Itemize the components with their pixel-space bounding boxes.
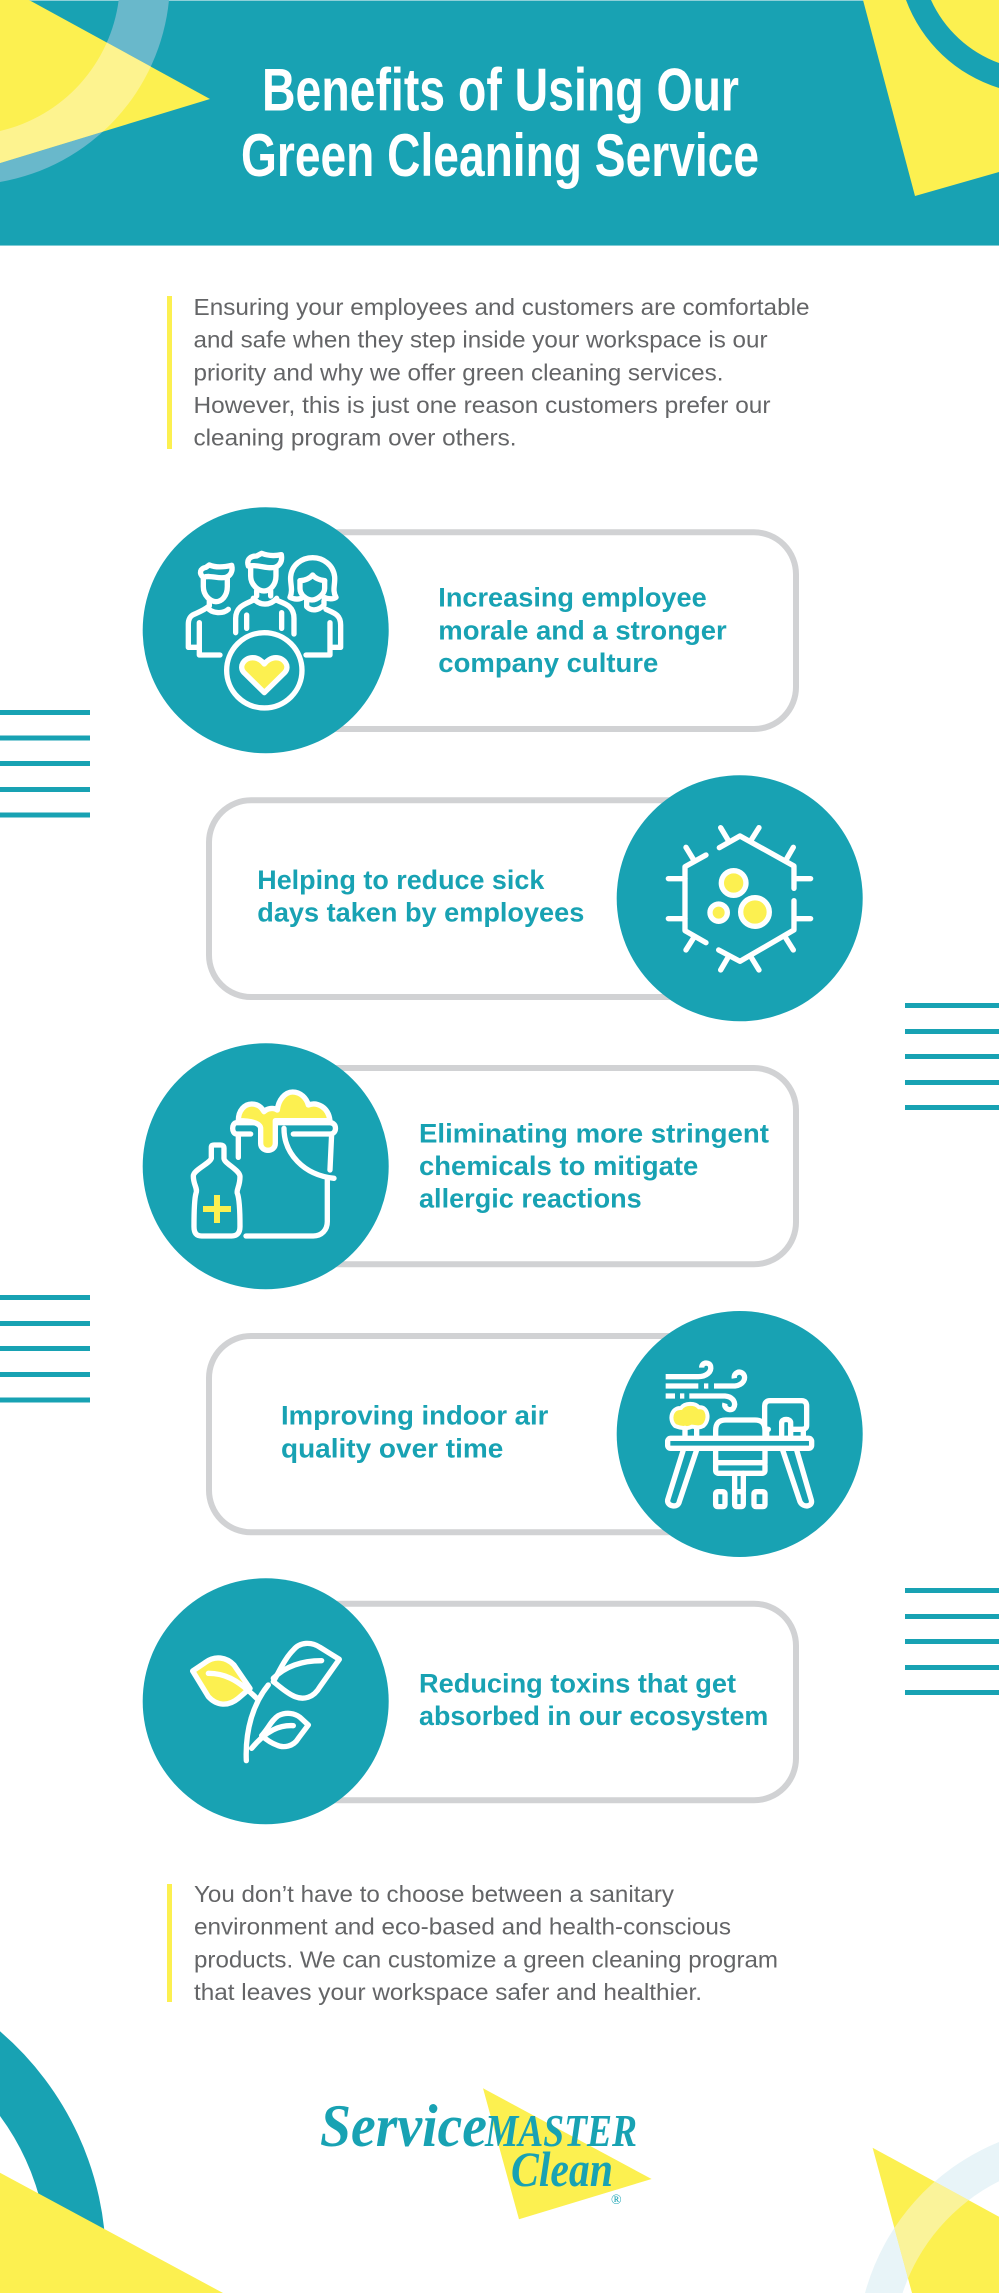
- intro text block: cleaning program over others.: [194, 425, 516, 451]
- text: employee morale: company culture: [438, 648, 658, 678]
- title: [241, 56, 759, 189]
- text: employee morale: Increasing employee: [438, 583, 707, 613]
- logo: ServiceMaster Clean: Service: [320, 2093, 487, 2159]
- text: chemicals: [419, 1118, 769, 1214]
- logo: ServiceMaster Clean: [320, 2088, 652, 2219]
- panel: ecosystem: [143, 1578, 796, 1824]
- intro text block: and safe when they step inside your workspace is our: [194, 327, 768, 353]
- closing text block: [167, 1881, 778, 2005]
- logo: ServiceMaster Clean: Clean: [511, 2141, 613, 2197]
- intro text block: However, this is just one reason customers prefer our: [194, 392, 771, 418]
- intro text block: Ensuring your employees and customers are comfortable: [194, 294, 810, 320]
- text: indoor air: [281, 1400, 548, 1463]
- icon: desk and airflow: [666, 1363, 812, 1507]
- text: employee morale: [438, 583, 727, 678]
- side stripes right upper: [905, 1003, 999, 1110]
- text: chemicals: allergic reactions: [419, 1184, 642, 1214]
- text: indoor air: quality over time: [281, 1433, 503, 1463]
- logo: ServiceMaster Clean: MASTER: [484, 2105, 637, 2156]
- icon: germ cell: [668, 828, 811, 970]
- panel: sick days: [209, 775, 863, 1021]
- panel: indoor air: [209, 1311, 863, 1557]
- panel: chemicals: [143, 1043, 796, 1289]
- closing text block: products. We can customize a green cleaning program: [194, 1946, 778, 1972]
- text: sick days: Helping to reduce sick: [257, 865, 545, 895]
- logo: ServiceMaster Clean: ®: [611, 2193, 622, 2208]
- side stripes left upper: [0, 710, 90, 818]
- text: employee morale: morale and a stronger: [438, 615, 727, 645]
- text: sick days: days taken by employees: [257, 898, 584, 928]
- text: chemicals: Eliminating more stringent: [419, 1118, 769, 1148]
- intro text block: priority and why we offer green cleaning services.: [194, 359, 724, 385]
- icon: leaves: [193, 1643, 339, 1761]
- text: indoor air: Improving indoor air: [281, 1400, 548, 1430]
- closing text block: environment and eco-based and health-conscious: [194, 1914, 731, 1940]
- icon: bucket and bottle: [193, 1092, 335, 1236]
- side stripes left lower: [0, 1295, 90, 1402]
- decoration: bottom left shapes: [0, 2031, 223, 2293]
- intro text block: [167, 294, 810, 451]
- decoration: bottom right shapes: [865, 2142, 999, 2293]
- icon: team with heart: [188, 553, 341, 708]
- closing text block: You don’t have to choose between a sanitary: [194, 1881, 675, 1907]
- text: ecosystem: Reducing toxins that get: [419, 1668, 736, 1698]
- text: ecosystem: [419, 1668, 768, 1731]
- header banner: [0, 0, 999, 246]
- text: ecosystem: absorbed in our ecosystem: [419, 1701, 768, 1731]
- title: Benefits of Using Our: [262, 56, 739, 124]
- text: sick days: [257, 865, 584, 928]
- closing text block: that leaves your workspace safer and healthier.: [194, 1979, 702, 2005]
- title: Green Cleaning Service: [241, 122, 759, 189]
- side stripes right lower: [905, 1588, 999, 1695]
- panel: employee morale: [143, 507, 796, 753]
- text: chemicals: chemicals to mitigate: [419, 1151, 698, 1181]
